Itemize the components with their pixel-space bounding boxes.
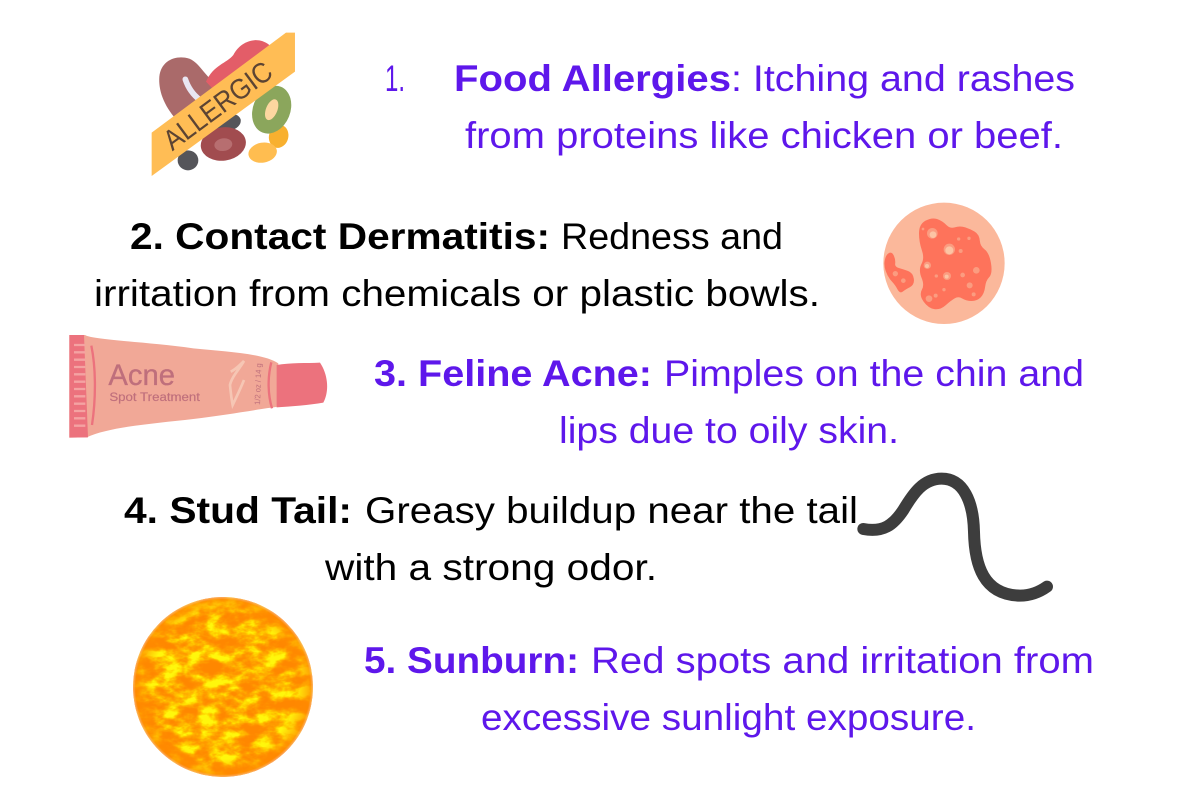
item 1: food allergies [385, 58, 1075, 156]
item 1: food allergies: from proteins like chicken or beef. [465, 115, 1063, 156]
item 2: contact dermatitis: Redness and [561, 216, 783, 257]
item 3: feline acne: Pimples on the chin and [664, 353, 1084, 394]
item 2: contact dermatitis: irritation from chemicals or plastic bowls. [94, 273, 820, 314]
icon: tail curve [863, 479, 1047, 596]
item 5: sunburn: excessive sunlight exposure. [481, 697, 976, 738]
item 5: sunburn: Red spots and irritation from [591, 640, 1094, 681]
item 3: feline acne: 3. Feline Acne: [374, 353, 652, 394]
tube label: Spot Treatment: Spot Treatment [109, 390, 201, 404]
item 4: stud tail: Greasy buildup near the tail [365, 490, 858, 531]
item 1: food allergies: 1. [385, 58, 405, 99]
item 2: contact dermatitis [94, 216, 820, 314]
item 2: contact dermatitis: 2. Contact Dermatitis: [130, 216, 550, 257]
icon: acne spot treatment tube [69, 335, 327, 438]
tube label: size: 1/2 oz / 14 g [253, 363, 263, 405]
item 4: stud tail [124, 490, 858, 588]
icon: skin rash circle [883, 203, 1005, 324]
item 4: stud tail: 4. Stud Tail: [124, 490, 352, 531]
item 1: food allergies: : Itching and rashes [731, 58, 1075, 99]
banner label: ALLERGIC: ALLERGIC [157, 55, 279, 157]
item 5: sunburn: 5. Sunburn: [364, 640, 579, 681]
tube label: Acne: Acne [108, 359, 175, 392]
icon: sun [133, 597, 313, 777]
item 3: feline acne: lips due to oily skin. [559, 410, 899, 451]
item 3: feline acne [374, 353, 1084, 451]
item 5: sunburn [364, 640, 1094, 738]
icon: allergic foods with banner [152, 33, 298, 176]
item 4: stud tail: with a strong odor. [324, 547, 657, 588]
item 1: food allergies: Food Allergies [454, 58, 731, 99]
